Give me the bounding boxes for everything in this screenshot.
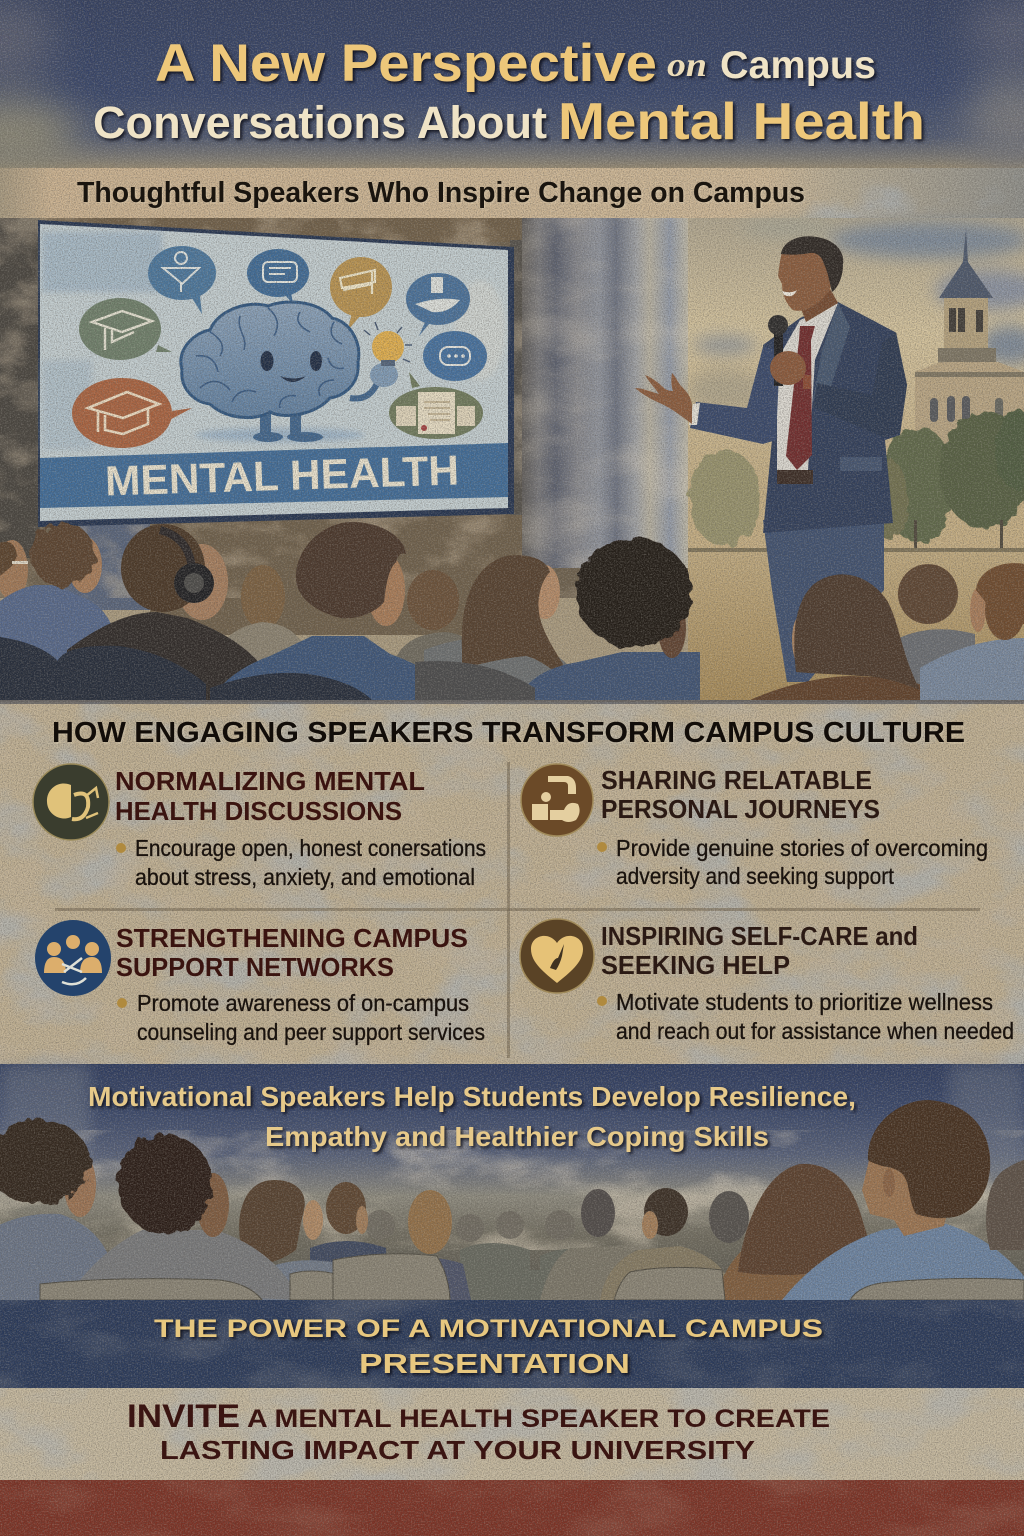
second man: [72, 1134, 300, 1300]
resilience message: Motivational Speakers Help Students Develop Resilience,: [88, 1081, 856, 1112]
body text: counseling and peer support services: [137, 1019, 485, 1045]
window view background: [688, 218, 1024, 598]
forward arm sleeve: [690, 347, 780, 444]
man with headphones: [67, 524, 269, 700]
body text: Encourage open, honest conersations: [135, 835, 486, 861]
seat backs: [0, 637, 535, 700]
trousers: [763, 515, 884, 682]
neck: [797, 285, 838, 322]
body text: about stress, anxiety, and emotional: [135, 864, 475, 890]
body text: [137, 990, 485, 1045]
far right profile: [986, 1160, 1024, 1250]
background audience: [214, 564, 975, 700]
card: normalizing mental health discussions: [33, 764, 486, 890]
label: mental health: MENTAL HEALTH: [104, 446, 460, 505]
presentation heading: THE POWER OF A MOTIVATIONAL CAMPUS: [154, 1315, 823, 1343]
hand holding mic: [770, 351, 806, 385]
resilience message: Empathy and Healthier Coping Skills: [265, 1121, 769, 1152]
front audience: far left man with glasses: [0, 540, 28, 600]
resilience message: [88, 1081, 856, 1152]
bullet: [116, 843, 126, 853]
heading: [601, 921, 918, 980]
heading: SHARING RELATABLE: [601, 765, 872, 795]
hair: [781, 236, 843, 292]
shirt cuffs: [689, 403, 700, 425]
man with brown hair in blue jacket: [210, 522, 460, 700]
title: Campus: [720, 44, 876, 87]
seats: [40, 1254, 1024, 1300]
trees: [689, 410, 1024, 552]
bullet: [597, 996, 607, 1006]
body text: [135, 835, 486, 890]
title: [93, 34, 925, 151]
head: [778, 240, 835, 311]
panel: bottom red band: [0, 1480, 1024, 1536]
man with curly hair: [518, 538, 700, 700]
pocket: [840, 457, 882, 471]
call to action: [127, 1398, 830, 1465]
title: Conversations About: [93, 97, 547, 148]
body text: Provide genuine stories of overcoming: [616, 835, 988, 861]
back wall: [0, 218, 700, 635]
bullet: [117, 998, 127, 1008]
tie: [786, 326, 815, 470]
panel: subtitle band: [0, 168, 1024, 220]
bubble icons on screen: [72, 246, 487, 448]
brain mascot: [181, 302, 412, 442]
presentation heading: [154, 1315, 823, 1379]
call to action: INVITE: [127, 1398, 240, 1434]
large man on the right: [782, 1100, 1024, 1300]
belt: [777, 470, 813, 484]
heading: STRENGTHENING CAMPUS: [116, 923, 468, 953]
icon: sharing hands: [521, 764, 593, 836]
title: Mental Health: [558, 93, 925, 151]
call to action: LASTING IMPACT AT YOUR UNIVERSITY: [160, 1435, 755, 1465]
man in blue jacket: [0, 523, 116, 700]
panel: lower audience scene: [0, 1064, 1024, 1304]
title: on: [667, 47, 707, 84]
card: sharing relatable personal journeys: [521, 764, 988, 889]
panel: motivational presentation navy band: [0, 1300, 1024, 1390]
bottom banner: [40, 443, 508, 508]
woman left of centre: [239, 1180, 372, 1300]
heading: SUPPORT NETWORKS: [116, 952, 394, 982]
man at right edge: [920, 563, 1024, 700]
speaker: [635, 236, 907, 682]
left open hand: [635, 373, 692, 424]
heading: NORMALIZING MENTAL: [115, 766, 425, 796]
jacket lapel: [813, 303, 850, 405]
icon: support network people: [35, 920, 111, 996]
campus building with clock tower: [915, 228, 1024, 455]
suit jacket: [763, 302, 907, 533]
heading: [601, 765, 880, 824]
body text: Motivate students to prioritize wellness: [616, 989, 993, 1015]
heading: [116, 923, 468, 982]
panel: invitation band: [0, 1388, 1024, 1482]
subtitle: Thoughtful Speakers Who Inspire Change on Campus: [77, 177, 805, 209]
heading: PERSONAL JOURNEYS: [601, 794, 880, 824]
long-haired woman right of centre: [715, 1164, 886, 1300]
heading: INSPIRING SELF-CARE and: [601, 921, 918, 951]
card: inspiring self-care and seeking help: [520, 919, 1014, 1044]
heading: HEALTH DISCUSSIONS: [115, 796, 402, 826]
microphone: [774, 330, 783, 386]
card: strengthening campus support networks: [35, 920, 485, 1045]
presentation heading: PRESENTATION: [359, 1348, 630, 1379]
smile: [782, 290, 797, 296]
shirt: [777, 303, 838, 472]
title: A New Perspective: [155, 34, 657, 93]
section heading: HOW ENGAGING SPEAKERS TRANSFORM CAMPUS CULTURE: [52, 717, 965, 749]
raised arm sleeve: [813, 332, 907, 438]
icon: speech and megaphone: [33, 764, 109, 840]
body text: [616, 989, 1014, 1044]
clouds: [687, 219, 1024, 412]
woman near stage: [750, 574, 950, 700]
panel: header background: [0, 0, 1024, 171]
bullet: [597, 842, 607, 852]
audience in hero: [0, 522, 1024, 700]
icon: heart: [520, 919, 594, 993]
body text: Promote awareness of on-campus: [137, 990, 469, 1016]
stage floor: [688, 548, 1024, 700]
curtain column: [522, 218, 690, 568]
call to action: A MENTAL HEALTH SPEAKER TO CREATE: [247, 1405, 830, 1433]
woman with long hair: [424, 555, 576, 700]
back rows: [310, 1182, 749, 1300]
heading: [115, 766, 425, 826]
projection screen: [38, 220, 514, 527]
body text: adversity and seeking support: [616, 863, 895, 889]
body text: [616, 835, 988, 889]
heading: SEEKING HELP: [601, 950, 790, 980]
first man: [0, 1120, 112, 1300]
panel: transform section background: [0, 700, 1024, 1066]
